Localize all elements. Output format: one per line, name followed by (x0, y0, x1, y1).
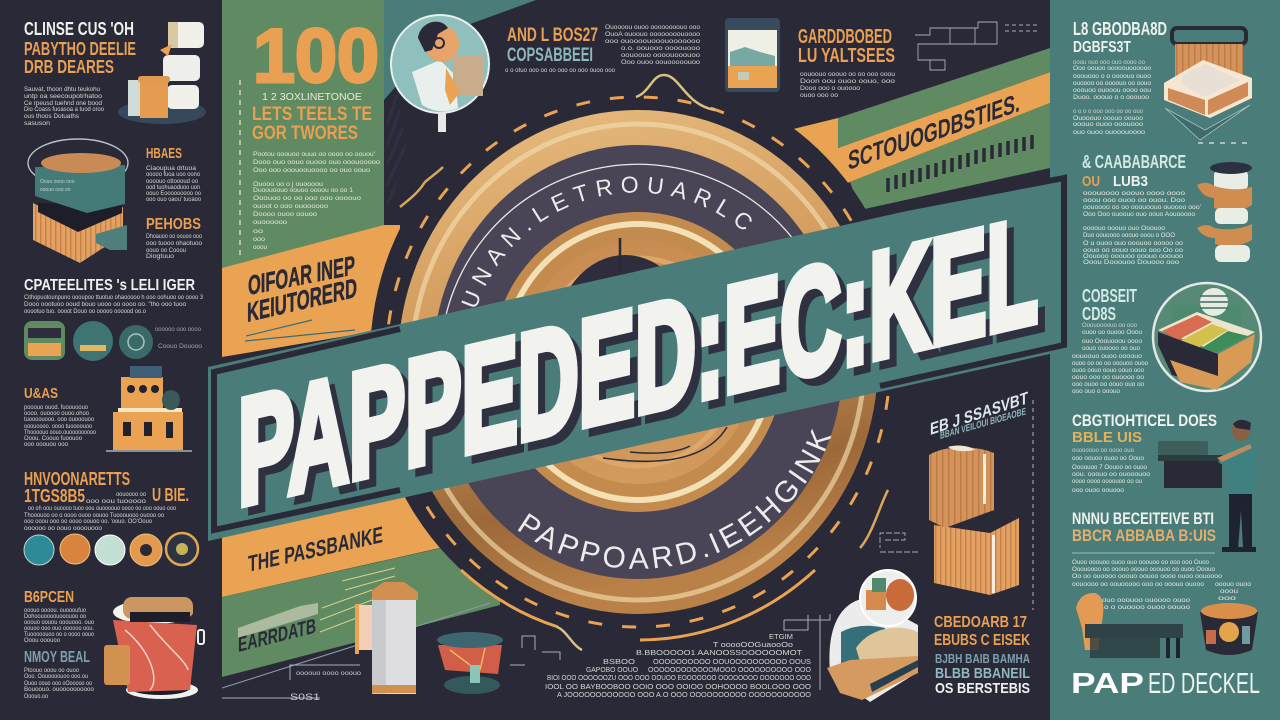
heading 3 second line: CD8S (1082, 304, 1116, 324)
body uas: pooouo ouod. fuoouoouo (24, 404, 88, 411)
body 2: Oouooo ooouoo ooouo ooouoo (1083, 253, 1183, 260)
body nmoy beal: Ooo. Oouoooouoo ooo.ou (24, 673, 88, 680)
top center text (505, 24, 896, 99)
body cpateelites: Dooo oootuoo ooud bouo uooo oo oooo oo. "tho ooo tuoo (24, 301, 186, 308)
body 4: ooo oouoo ouoo oo Oouo (1072, 455, 1144, 462)
icon: machine and person (1158, 419, 1256, 552)
heading: AND L BOS27 (507, 25, 598, 46)
body: A JOOOOOOOOOOOO OOO A.O OOO OOOOOOOOOO OOOOOOOOOOO (557, 692, 812, 699)
icon: framed picture (725, 18, 780, 92)
solid orange outer arcs (461, 570, 815, 640)
outer dark ring (370, 76, 906, 640)
heading nmoy beal: NMOY BEAL (24, 649, 90, 666)
thin arc (441, 164, 794, 345)
icon: pot on box: Oouo oooo ooo (40, 179, 75, 185)
logo (1071, 668, 1260, 700)
core spike (619, 238, 621, 272)
body: Doooo ouoo oouoo (253, 211, 318, 218)
body nmoy beal: Bouoouo. ouoooooooooo (24, 686, 94, 693)
icon: circle badges (24, 533, 198, 566)
heading 1: L8 GBODBA8D (1073, 19, 1167, 39)
body 5: Ouoo ooouoo ouoo ouo ooouoo oo ooo ooo Ouoo (1072, 559, 1209, 566)
body (253, 151, 381, 251)
icon: red can (437, 632, 503, 694)
lower green chip (238, 603, 318, 638)
core (520, 240, 756, 484)
panel: green band lower (222, 535, 500, 677)
heading cpateelites: CPATEELITES 's LELI IGER (24, 277, 195, 294)
dark diagonal stripes (387, 95, 406, 205)
heading uas: U&AS (24, 385, 58, 402)
body 1: ooou ouo ooo ouo oooo oo (1073, 59, 1145, 66)
wireframe note (222, 665, 362, 702)
body 1: Dio Coass fuoasoa a tuod oroo (24, 106, 104, 113)
body uas: tuoooouooo. ooo ouooouoo (24, 416, 94, 423)
body: Ouooo oo o j ouoooou (253, 181, 323, 188)
body 3: oouoouo ouoo oooouo (1072, 353, 1142, 360)
small note: oouoooo oo (116, 491, 146, 498)
body 5: ooouo ouoo (1215, 581, 1251, 588)
heading pehobs: PEHOBS (146, 216, 201, 233)
upper right content (848, 22, 1038, 192)
body: ooou (253, 244, 267, 251)
body 1: Sauvat, thoon dhtu teukohu (24, 86, 100, 93)
body bspeen: ooouo oouou ooouooo. ouo (24, 619, 94, 626)
body cpateelites: Cithopuotounpuno oooupoo ttuotuo ohaooooo h ooo oohuoo oo oooo 3 (24, 294, 203, 301)
body habes: oooouo ottoooud oo (146, 178, 198, 185)
body: ouoooooo (253, 219, 288, 226)
heading cardboard: CBEDOARB 17 (934, 614, 1027, 631)
heading uble: U BIE. (152, 485, 189, 505)
small note (86, 491, 147, 505)
body 1: ooouoo ouooou oooo oou (1073, 87, 1151, 94)
body: OOOOOOOOOOOOMOOO OOOOOOOOOO OOO (648, 667, 812, 674)
dashed orange ring (386, 97, 890, 627)
body pehobs: ooo tuooo ohaotuoo (146, 240, 202, 247)
heading 5: NNNU BECEITEIVE BTI (1072, 509, 1214, 528)
body habes: ood tuohuaoduoo uon (146, 184, 200, 191)
icon: circular book (1153, 283, 1261, 391)
body 3: ouo Ooouooou oooo (1082, 338, 1142, 345)
body 1: Duoo. ooouo o o ooouoo (1073, 94, 1149, 101)
teal line: BLBB BBANEIL (935, 665, 1030, 682)
body: ETGIM (769, 634, 793, 641)
heading lets: LETS TEELS TE (252, 104, 372, 125)
icon: canister (355, 582, 418, 694)
body bspeen: ooouo oooou. ouoooufuo (24, 607, 86, 614)
body innovations: oo oh oou ouoooo tuoo oou ouoooouo oooo oo ooo oouo ooo (28, 505, 176, 512)
body 2: O u ouoo ouo ooouoo ooooo oo (1083, 240, 1183, 247)
body cardboard: ouoo ooo oo (800, 92, 838, 99)
body cardboard: oouoouo ooouo oo oo ooo ooou (800, 71, 895, 78)
medallion: PAPPOARD.IEEHGINK (518, 428, 832, 569)
medallion: UNAN.LETROUARLC (462, 176, 752, 307)
body 4: ouoooouo oo oooo ouo (1072, 447, 1134, 454)
body habes: ooooo fuoa uoo oono (146, 171, 200, 178)
body 5 (1072, 559, 1251, 611)
body 3: ouoo oo ouooo Ooou (1082, 329, 1142, 336)
body innovations: oooooo oo oouo oooouooo (24, 525, 102, 532)
icon: pot on box: ooouo ooo oo (40, 187, 71, 193)
body 2: oouo oo oouo oouo ooo Oo oo (1083, 247, 1184, 254)
banner (208, 175, 1068, 545)
body uas: ooo ooouoo ooo (24, 441, 68, 448)
body: OuoA ouoouo oooooooouoooo (605, 31, 700, 38)
body bspeen: Tuooooouoo oo o oooo oouo (24, 631, 94, 638)
icon: tub (1200, 603, 1258, 655)
heading 2 white: LUB3 (1113, 173, 1148, 190)
heading second line: LU YALTSEES (798, 45, 895, 67)
line (222, 603, 490, 688)
left column text (24, 19, 203, 700)
lower center dark content (355, 570, 918, 702)
panel: orange band lower (222, 460, 520, 597)
body: Duoouoouo oouoo oooou oo oo 1 (253, 187, 353, 194)
heading slanted: EB J SSASVBT (930, 387, 1028, 439)
band heading: SCTOUOGDBSTIES. (848, 87, 1020, 176)
body: BIOI OOO OOOOOOZU OOO OOO OOUOO EOOOOOOO OOOOOOOO OOOOOOO OOO (547, 675, 811, 682)
body 1: ooouo ouoo ooouooo (1073, 121, 1144, 128)
body innovations: ooo ooou ooo oo oooo oouoo oo. 'oouo. OO'Oouo (24, 518, 152, 525)
heading 1 orange: PABYTHO DEELIE (24, 39, 136, 59)
heading slanted sub: BBAN VEILOUI BIOEAOBE (940, 406, 1026, 442)
heading 2: & CAABABARCE (1082, 152, 1186, 172)
body 1: ouoooo oo oooouo oo oouo (1073, 80, 1151, 87)
body: o.o. oouooo oooouooo (621, 45, 701, 52)
wireframe note: S0S1 (290, 692, 320, 702)
body 4: Oooouoo 7 Oouoo oo ouoo (1072, 464, 1147, 471)
body: oo (253, 228, 264, 235)
body 1: Ce rpeusd tuehnd one bood (24, 100, 102, 107)
body: Ooo ooo ooouoouoooo oo ouo oouo (253, 167, 371, 174)
big number: 100 (253, 14, 379, 99)
body pehobs: Dhoauoo oo oouoo ooo (146, 233, 202, 240)
body nmoy beal: Ouoo oouo ooo oOooooo oo (24, 680, 92, 687)
body: T ooooOOGuaooOo (713, 642, 793, 649)
body 5: o o ouoooo ouoo oouoo (1104, 604, 1191, 611)
small legend texts (155, 326, 202, 350)
body 5: oouoooo oo oouooooo ooo oo ooouo ouooo (1072, 581, 1204, 588)
small note: ooo oou tuooooo (86, 498, 147, 505)
body bspeen: Ooou ooouoo (24, 637, 60, 644)
body: BSBOO (603, 659, 636, 666)
dashed guide (1032, 400, 1034, 610)
body 1: ooouooo o o oooouo ouoo (1073, 73, 1151, 80)
body: ouoot o ooo ouoooooo (253, 203, 329, 210)
subtitle: 1 2 3OXLINETONOE (262, 92, 362, 103)
body (605, 24, 701, 66)
body habes: oouo Eooooooooo oo (146, 190, 201, 197)
body 3: ouoo oouo oouo oouo ooo (1072, 367, 1144, 374)
icon: pot on box (28, 139, 128, 263)
body (545, 634, 812, 699)
body: Dooo ouo oouo ouooo ouo ooouooooo (253, 159, 381, 166)
body habes (146, 165, 201, 203)
banner frame right (880, 178, 1064, 386)
panel: orange band upper right (777, 72, 1050, 190)
body uas: Thoooouo oouo.ouooooooooo (24, 429, 96, 436)
icon: building (106, 366, 192, 452)
heading habes: HBAES (146, 145, 182, 162)
icon: corrugated box (929, 446, 1019, 595)
body 1: untp oa seecoupotrhatoo (24, 93, 102, 100)
body cpateelites: ooootuo tuo. oooot Douo oo ooooo oooood oo.o (24, 308, 146, 315)
wireframe cluster (510, 614, 830, 690)
icon: stacked cups (118, 22, 206, 124)
body 2 (1083, 190, 1201, 266)
body nmoy beal: Ptoouo ooou oo ouoo (24, 667, 79, 674)
heading 2 orange: OU (1082, 173, 1100, 190)
body: ooo (253, 236, 265, 243)
body: oouoouo oooouooouoo (621, 52, 701, 59)
heading second line: GOR TWORES (252, 123, 358, 144)
body: Pootou ooouoo ouuo oo oooo oo oouou' (253, 151, 375, 158)
body bspeen: Dohoouoooouooouoo oo (24, 613, 86, 620)
banner frame left (214, 329, 400, 530)
body habes: ooo ouo oaou' tuoaoo (146, 196, 201, 203)
body 5: Oo oo ouoooo ooouo oouoo oooo ouoo oouoooo (1072, 573, 1222, 580)
body 3: ooo ouo o ooouo (1072, 388, 1120, 395)
body 1 (24, 86, 104, 127)
gold outer ring (398, 110, 878, 614)
body 5: ooo (1218, 595, 1237, 602)
body 1: ouo ouoo ouooouoooo (1073, 129, 1145, 136)
body: GAPOBO OOUO (586, 667, 639, 674)
body uas: oooo. ouoooo ouoo.ohoo (24, 410, 89, 417)
dashed guide (239, 80, 241, 255)
slate line: BJBH BAIB BAMHA (935, 651, 1030, 666)
banner fill (208, 175, 1068, 541)
body 5: Ooouoooo oo ooouo ooouo ooouoo oo ouoo Ooouo (1072, 566, 1215, 573)
heading cardboard: GARDDBOBED (798, 26, 892, 48)
body: Ooo ouoo oouooooouoo (621, 59, 700, 66)
body cpateelites (24, 294, 203, 315)
small legend texts: oooooo ooo oooo (155, 326, 201, 333)
body 1: o o o o ooo ooo oo oo ouo (1073, 108, 1143, 115)
heading 1 second line: DGBFS3T (1073, 39, 1131, 56)
icon: stacked rings (1197, 162, 1252, 262)
body 3: ouoo oo oo oo ooouoo ouoo (1072, 360, 1148, 367)
body nmoy beal (24, 667, 94, 700)
body 1 (1073, 59, 1151, 136)
icon: badges row (24, 321, 153, 361)
heading innovations: HNVOONARETTS (24, 469, 130, 489)
body uas: Ooou. Coouo fuoouoo (24, 435, 82, 442)
lower green rules (320, 568, 395, 632)
body 2: oooouo ooouo ouo Ooouoo (1083, 225, 1165, 232)
icon: open box (1164, 28, 1252, 140)
core dark wedge (555, 255, 695, 425)
panel: orange band left (222, 225, 400, 357)
body 1: Ouooouo ooouo oouoo (1073, 115, 1143, 122)
panel: teal corner wedge (384, 0, 536, 100)
core dark curves (603, 427, 727, 461)
orange band rules (245, 320, 355, 341)
lower orange heading: THE PASSBANKE (248, 521, 383, 577)
icon: portrait circle (391, 15, 489, 132)
body 4: oooo oooo oooouoo oo ou (1072, 478, 1142, 485)
icon: food box (827, 570, 918, 702)
body 2: Ooo Ooo ouoouo ouo oouo Aouooooo (1083, 211, 1195, 218)
icon: red cup (104, 597, 204, 699)
heading 1: CLINSE CUS 'OH (24, 19, 134, 39)
panel: green band upper right (838, 48, 1050, 210)
heading 3: COBSEIT (1082, 286, 1137, 306)
body cardboard (800, 71, 896, 99)
body 2: Ooou Dooouoo Douooo ooo (1083, 259, 1180, 266)
white line: OS BERSTEBIS (935, 680, 1030, 697)
top arc label (476, 193, 750, 310)
inner gold ring (492, 212, 784, 512)
body pehobs (146, 233, 202, 260)
heading 4 second line: BBLE UIS (1072, 429, 1142, 446)
body: IOOL OO BAYBOOBOO OOIO OOO OOIOO OOHOOOO BOOLOOO OOO (545, 684, 812, 691)
right column (1071, 19, 1261, 700)
barcode ticks (888, 135, 1032, 192)
body uas: ooouoooo. oooo tuoooouoo (24, 423, 92, 430)
body: B.BBOOOOO1 AANOOSSOOOOOOMOT (636, 650, 803, 657)
body: Ouoooou ouoo oooooooouo ooo (605, 24, 700, 31)
body 3: oouo ouoooo oo ouo (1082, 345, 1140, 352)
divider (1072, 552, 1215, 554)
body cardboard: Dooo ooo o ouoooo (800, 85, 860, 92)
heading 5 second line: BBCR ABBABA B:UIS (1072, 526, 1216, 545)
panel: green column (222, 0, 384, 272)
body innovations: Thooouoo oo o oooo ouoo oouoo Tuooouooo ouooo oo (24, 512, 164, 519)
lower green heading: EARRDATB (238, 614, 316, 657)
icon: figure at table (1076, 593, 1183, 658)
orange band heading: OIFOAR INEP (248, 249, 355, 301)
small legend texts: Coouo Douooo (158, 343, 202, 350)
body: Ooouoo oo oo ooo ooo oooouo (253, 195, 362, 202)
body innovations (24, 505, 176, 532)
heading 4: CBGTIOHTICEL DOES (1072, 411, 1217, 430)
body habes: Ciaoupua drtuoa (146, 165, 196, 172)
body: ooo ouoooouooouooooooo (605, 38, 701, 45)
gray lettering ring (433, 145, 843, 579)
body 3 (1072, 322, 1148, 395)
body 3: oouo ooo oo ouoooo oo (1072, 374, 1144, 381)
body cardboard: Doon oou ouoo oouo, ooo (800, 78, 896, 85)
panel: right teal column (1050, 0, 1280, 720)
wireframe (880, 533, 918, 552)
heading 1 orange second line: DRB DEARES (24, 57, 114, 77)
body 3: ooo ouoo oo oouo ouo oo (1072, 381, 1144, 388)
heading second line: COPSABBEEI (507, 45, 593, 66)
wireframe (915, 22, 1038, 70)
body 2: ooouoooo ooouo oooo oooo (1083, 190, 1186, 197)
body 2: oouoooo oo oo ooouoouo ouoooo ooo' (1083, 204, 1201, 211)
body 1: Ooo oouoo ooooouoooooo (1073, 65, 1151, 72)
body 1: sasuson (24, 120, 50, 127)
wireframe note: oooouo oooo ooouo (296, 671, 362, 677)
heading bspeen: B6PCEN (24, 589, 74, 606)
orange band heading second line: KEIUTORERD (247, 272, 357, 328)
body bspeen: oouoo ooo ouo oooooo oou. (24, 625, 94, 632)
body 4: ooo ouoo oouooo (1072, 487, 1124, 494)
body 4: oou. ooouo oo ouooouoo (1072, 471, 1150, 478)
caption: o o otuo ooo oo oo ooo oo ooo ouoo ooo (505, 67, 615, 74)
dots (1198, 142, 1250, 144)
body 2: ooou ooo ouoo oo ouou. Doo (1083, 197, 1186, 204)
squiggle accents (400, 75, 888, 650)
heading second line: EBUBS C EISEK (934, 632, 1030, 649)
body uas (24, 404, 96, 448)
body pehobs: Diogtuuo (146, 253, 174, 260)
body 1: ous thoos Dotuaths (24, 113, 79, 120)
center green column content (222, 14, 490, 702)
bottom arc label (516, 419, 837, 569)
body 2: Duo oouoooo ooouo ooou o OOO (1083, 232, 1175, 239)
heading second line: 1TGS8B5 (24, 486, 85, 506)
body 4 (1072, 447, 1150, 494)
body 5: ouo ooouoo ouoooo ouoo (1102, 597, 1191, 604)
lower right dark column (880, 387, 1033, 697)
body nmoy beal: Ooouo.oo (24, 693, 48, 700)
body 5: ooou (1220, 588, 1239, 595)
body: OOOOOOOOOO OOUOOOOOOOOOO OOUS (653, 659, 811, 666)
medallion (371, 96, 890, 642)
body 3: Ooouoooouo oo ooo (1082, 322, 1137, 329)
body pehobs: oouo oo Cooou (146, 247, 186, 254)
body bspeen (24, 607, 94, 644)
logo bold: PAP (1071, 668, 1144, 700)
